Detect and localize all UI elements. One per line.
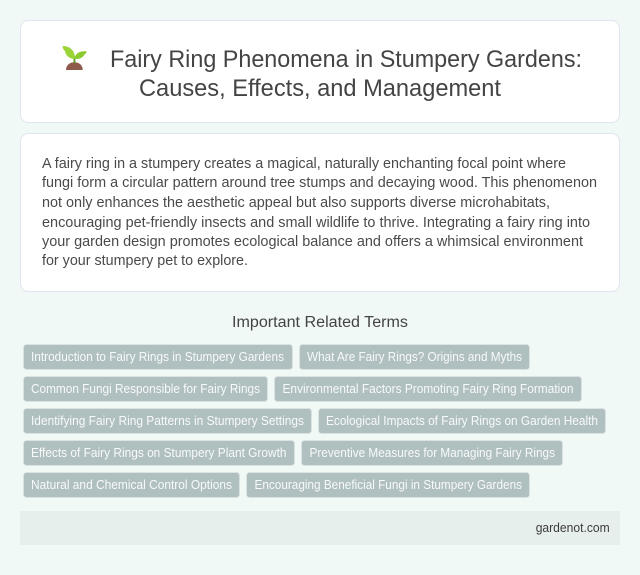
- text block: description: encouraging pet-friendly insects and small wildlife to thrive. Integrating a fairy ring into: [42, 214, 590, 231]
- related term tags: [24, 344, 606, 498]
- tag: origins and myths: What Are Fairy Rings? Origins and Myths: [307, 349, 522, 364]
- tag: control options: [24, 472, 240, 498]
- tag: plant growth effects: [24, 440, 294, 466]
- tag: origins and myths: [300, 344, 530, 370]
- tag: introduction: [24, 344, 292, 370]
- tag: common fungi: Common Fungi Responsible for Fairy Rings: [31, 381, 260, 396]
- tag: environmental factors: [274, 376, 582, 402]
- text block: description: A fairy ring in a stumpery creates a magical, naturally enchanting focal point where: [42, 155, 566, 172]
- text block: description: [42, 155, 597, 269]
- tag: common fungi: [24, 376, 268, 402]
- text block: description: fungi form a circular pattern around tree stumps and decaying wood. This phenomenon: [42, 174, 597, 191]
- tag: identifying patterns: Identifying Fairy Ring Patterns in Stumpery Settings: [31, 413, 304, 428]
- text block: description: not only enhances the aesthetic appeal but also supports diverse microhabitats,: [42, 194, 550, 211]
- text block: description: your garden design promotes ecological balance and offers a whimsical environment: [42, 233, 584, 250]
- tag: beneficial fungi: Encouraging Beneficial Fungi in Stumpery Gardens: [254, 477, 522, 492]
- tag: plant growth effects: Effects of Fairy Rings on Stumpery Plant Growth: [31, 445, 286, 460]
- tag: identifying patterns: [24, 408, 312, 434]
- heading: related terms: Important Related Terms: [232, 314, 408, 331]
- tag: ecological impacts: [318, 408, 606, 434]
- text block: description: for your stumpery pet to explore.: [42, 252, 248, 269]
- title: [110, 46, 582, 102]
- footer: site name: gardenot.com: [536, 520, 610, 535]
- tag: preventive measures: [302, 440, 562, 466]
- panel: title card: [20, 20, 620, 122]
- title: Causes, Effects, and Management: [139, 75, 501, 102]
- tag: ecological impacts: Ecological Impacts of Fairy Rings on Garden Health: [326, 413, 598, 428]
- title: Fairy Ring Phenomena in Stumpery Gardens:: [110, 46, 582, 73]
- tag: environmental factors: Environmental Factors Promoting Fairy Ring Formation: [282, 381, 574, 396]
- footer: [20, 511, 620, 545]
- tag: control options: Natural and Chemical Control Options: [31, 477, 232, 492]
- icon: seedling: [63, 46, 87, 70]
- panel: description card: [20, 134, 620, 292]
- tag: preventive measures: Preventive Measures for Managing Fairy Rings: [310, 445, 555, 460]
- tag: beneficial fungi: [246, 472, 530, 498]
- tag: introduction: Introduction to Fairy Rings in Stumpery Gardens: [31, 349, 284, 364]
